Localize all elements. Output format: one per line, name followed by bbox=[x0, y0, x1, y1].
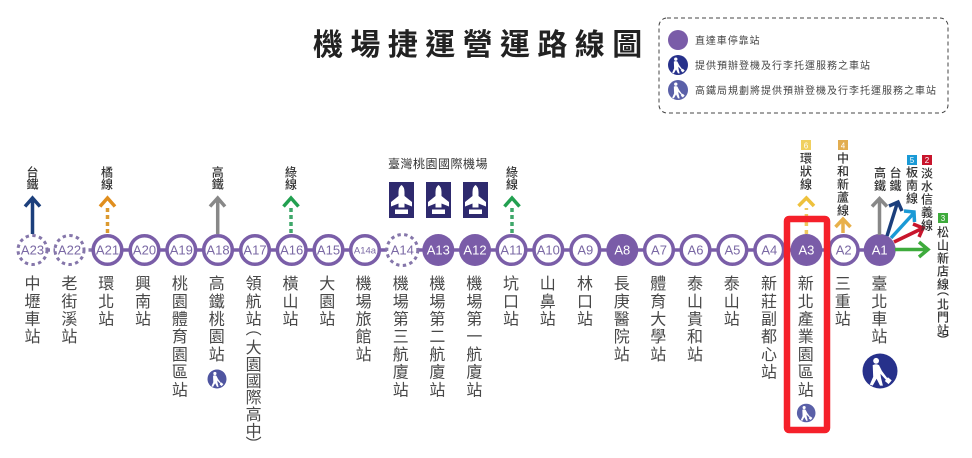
station A10: 山鼻站 bbox=[536, 275, 560, 328]
station A14a bbox=[351, 236, 379, 364]
station A17: A17 bbox=[243, 242, 267, 258]
station A11: A11 bbox=[500, 242, 523, 258]
station A15: A15 bbox=[317, 242, 340, 258]
icon: airport A14 bbox=[389, 182, 414, 218]
arrow: A2 to Zhonghe-Xinlu line: 中和新蘆線 bbox=[834, 151, 852, 217]
station A14a: A14a bbox=[354, 246, 377, 256]
station A3: 新北產業園區站 bbox=[794, 275, 818, 399]
station A9: A9 bbox=[577, 242, 593, 258]
label: Songshan-Xindian line bbox=[934, 213, 952, 346]
label: Songshan-Xindian line: 3 bbox=[941, 214, 946, 223]
station A6: 泰山貴和站 bbox=[683, 275, 707, 364]
arrow: A18 to HSR: 高鐵 bbox=[209, 165, 226, 191]
label: A1 HSR: 高鐵 bbox=[872, 165, 888, 192]
station A18 bbox=[204, 236, 232, 364]
station A21: 環北站 bbox=[94, 275, 118, 328]
station A19 bbox=[167, 236, 196, 399]
station A16 bbox=[277, 236, 306, 328]
station A23: 中壢車站 bbox=[20, 275, 44, 346]
station A12 bbox=[459, 234, 491, 399]
arrow: A21 to Orange line: 橘線 bbox=[98, 165, 116, 190]
station A5: 泰山站 bbox=[720, 275, 744, 328]
station A3: A3 bbox=[798, 242, 814, 258]
station A22: 老街溪站 bbox=[57, 275, 81, 346]
station A19: A19 bbox=[170, 242, 193, 258]
arrow: A21 to Orange line bbox=[98, 165, 116, 233]
icon: A1 check-in service bbox=[862, 354, 898, 388]
station A1 bbox=[864, 234, 896, 346]
station A21: A21 bbox=[96, 242, 119, 258]
icon: A18 planned check-in bbox=[208, 370, 226, 388]
legend panel bbox=[659, 18, 948, 113]
station A8: A8 bbox=[614, 242, 630, 258]
arrow: A3 to Circular line: 環狀線 bbox=[798, 152, 814, 191]
station A7: 體育大學站 bbox=[646, 275, 670, 364]
icon: airport A12 bbox=[463, 182, 488, 218]
arrow: A3 to Circular line: 6 bbox=[804, 142, 809, 150]
station A17 bbox=[241, 236, 269, 454]
title: 機場捷運營運路線圖 bbox=[313, 29, 650, 62]
arrow: A16 to Green line: 綠線 bbox=[282, 165, 300, 190]
station A4: A4 bbox=[761, 242, 777, 258]
station A19: 桃園體育園區站 bbox=[168, 275, 192, 399]
station A7: A7 bbox=[651, 242, 667, 258]
legend: planned check-in service stations: 高鐵局規劃將提供預辦登機及行李托運服務之車站 bbox=[695, 84, 937, 97]
station A4 bbox=[755, 236, 784, 381]
station A13: 機場第二航廈站 bbox=[425, 275, 449, 399]
station A1: A1 bbox=[872, 242, 888, 258]
label: A1 TRA: 台鐵 bbox=[887, 165, 904, 192]
arrow: A2 to Zhonghe-Xinlu line: 4 bbox=[841, 142, 846, 150]
station A21 bbox=[93, 236, 122, 328]
station A5 bbox=[718, 236, 747, 328]
station A8 bbox=[606, 234, 638, 364]
station A20: A20 bbox=[133, 242, 156, 258]
station A14 bbox=[387, 234, 418, 399]
label: Bannan line: 板南線 bbox=[904, 166, 920, 205]
highlight: red box around A3 bbox=[787, 219, 827, 430]
legend: planned check-in service stations bbox=[668, 80, 937, 100]
icon: A3 planned check-in bbox=[797, 404, 816, 422]
station A3 bbox=[790, 234, 822, 399]
arrow: A3 to Circular line bbox=[798, 140, 814, 234]
label: Tamsui-Xinyi line: 2 bbox=[925, 156, 930, 165]
legend: direct train stops bbox=[668, 30, 760, 50]
station A13 bbox=[422, 234, 454, 399]
station A17: ） bbox=[242, 436, 266, 454]
station A14: A14 bbox=[391, 242, 414, 258]
station A9 bbox=[571, 236, 600, 328]
station A16: 橫山站 bbox=[278, 275, 302, 328]
station A22: A22 bbox=[58, 242, 81, 258]
station A2: A2 bbox=[836, 242, 852, 258]
arrow: A2 to Zhonghe-Xinlu line bbox=[834, 140, 852, 233]
station A20: 興南站 bbox=[131, 275, 155, 328]
station A22 bbox=[55, 236, 84, 346]
label: Songshan-Xindian line: ） bbox=[934, 334, 952, 346]
station A11: 坑口站 bbox=[499, 275, 523, 328]
station A15: 大園站 bbox=[315, 275, 339, 328]
arrow: A18 to HSR bbox=[209, 165, 226, 234]
label: Songshan-Xindian line: 松山新店線 bbox=[934, 225, 952, 291]
legend: direct train stops: 直達車停靠站 bbox=[695, 34, 760, 47]
track line bbox=[32, 248, 880, 252]
station A10: A10 bbox=[537, 242, 560, 258]
station A7 bbox=[645, 236, 673, 364]
station A11 bbox=[497, 236, 526, 328]
station A9: 林口站 bbox=[573, 275, 597, 328]
arrow: A23 to TRA bbox=[24, 165, 41, 234]
station A20 bbox=[130, 236, 159, 328]
arrow: A11 to Green line: 綠線 bbox=[504, 165, 520, 190]
station A14: 機場第三航廈站 bbox=[389, 275, 413, 399]
station A6: A6 bbox=[688, 242, 703, 258]
station A1: 臺北車站 bbox=[867, 275, 891, 346]
station A15 bbox=[314, 236, 343, 328]
station A6 bbox=[681, 236, 710, 364]
arrow: A16 to Green line bbox=[282, 165, 300, 233]
station A13: A13 bbox=[427, 242, 450, 258]
label: Tamsui-Xinyi line: 淡水信義線 bbox=[918, 167, 936, 232]
icon: airport A13 bbox=[426, 182, 451, 218]
legend: check-in service stations bbox=[668, 55, 871, 75]
station A4: 新莊副都心站 bbox=[757, 275, 781, 381]
station A18: A18 bbox=[206, 242, 230, 258]
station A5: A5 bbox=[724, 242, 740, 258]
arrows: A1 transfers bbox=[872, 198, 928, 257]
station A2: 三重站 bbox=[831, 275, 855, 328]
station A17: 大園國際高中 bbox=[242, 339, 266, 439]
label: Bannan line: 5 bbox=[910, 156, 915, 165]
station A10 bbox=[534, 236, 563, 328]
station A18: 高鐵桃園站 bbox=[205, 275, 229, 364]
station A8: 長庚醫院站 bbox=[610, 275, 634, 364]
arrow: A23 to TRA: 台鐵 bbox=[24, 165, 41, 191]
station A12: A12 bbox=[463, 242, 487, 258]
station A12: 機場第一航廈站 bbox=[462, 275, 486, 399]
arrow: A11 to Green line bbox=[504, 165, 520, 233]
station A17: 領航站 bbox=[242, 275, 266, 328]
station A23: A23 bbox=[21, 242, 44, 258]
station A16: A16 bbox=[280, 242, 303, 258]
station A14a: 機場旅館站 bbox=[352, 275, 376, 364]
label: Songshan-Xindian line: （ bbox=[934, 284, 952, 296]
station A2 bbox=[829, 236, 858, 328]
airport label: 臺灣桃園國際機場 bbox=[388, 156, 488, 171]
legend: check-in service stations: 提供預辦登機及行李托運服務之車站 bbox=[695, 59, 871, 72]
label: Songshan-Xindian line: 北門站 bbox=[934, 298, 952, 337]
station A23 bbox=[18, 236, 47, 346]
station A17: （ bbox=[242, 320, 266, 338]
